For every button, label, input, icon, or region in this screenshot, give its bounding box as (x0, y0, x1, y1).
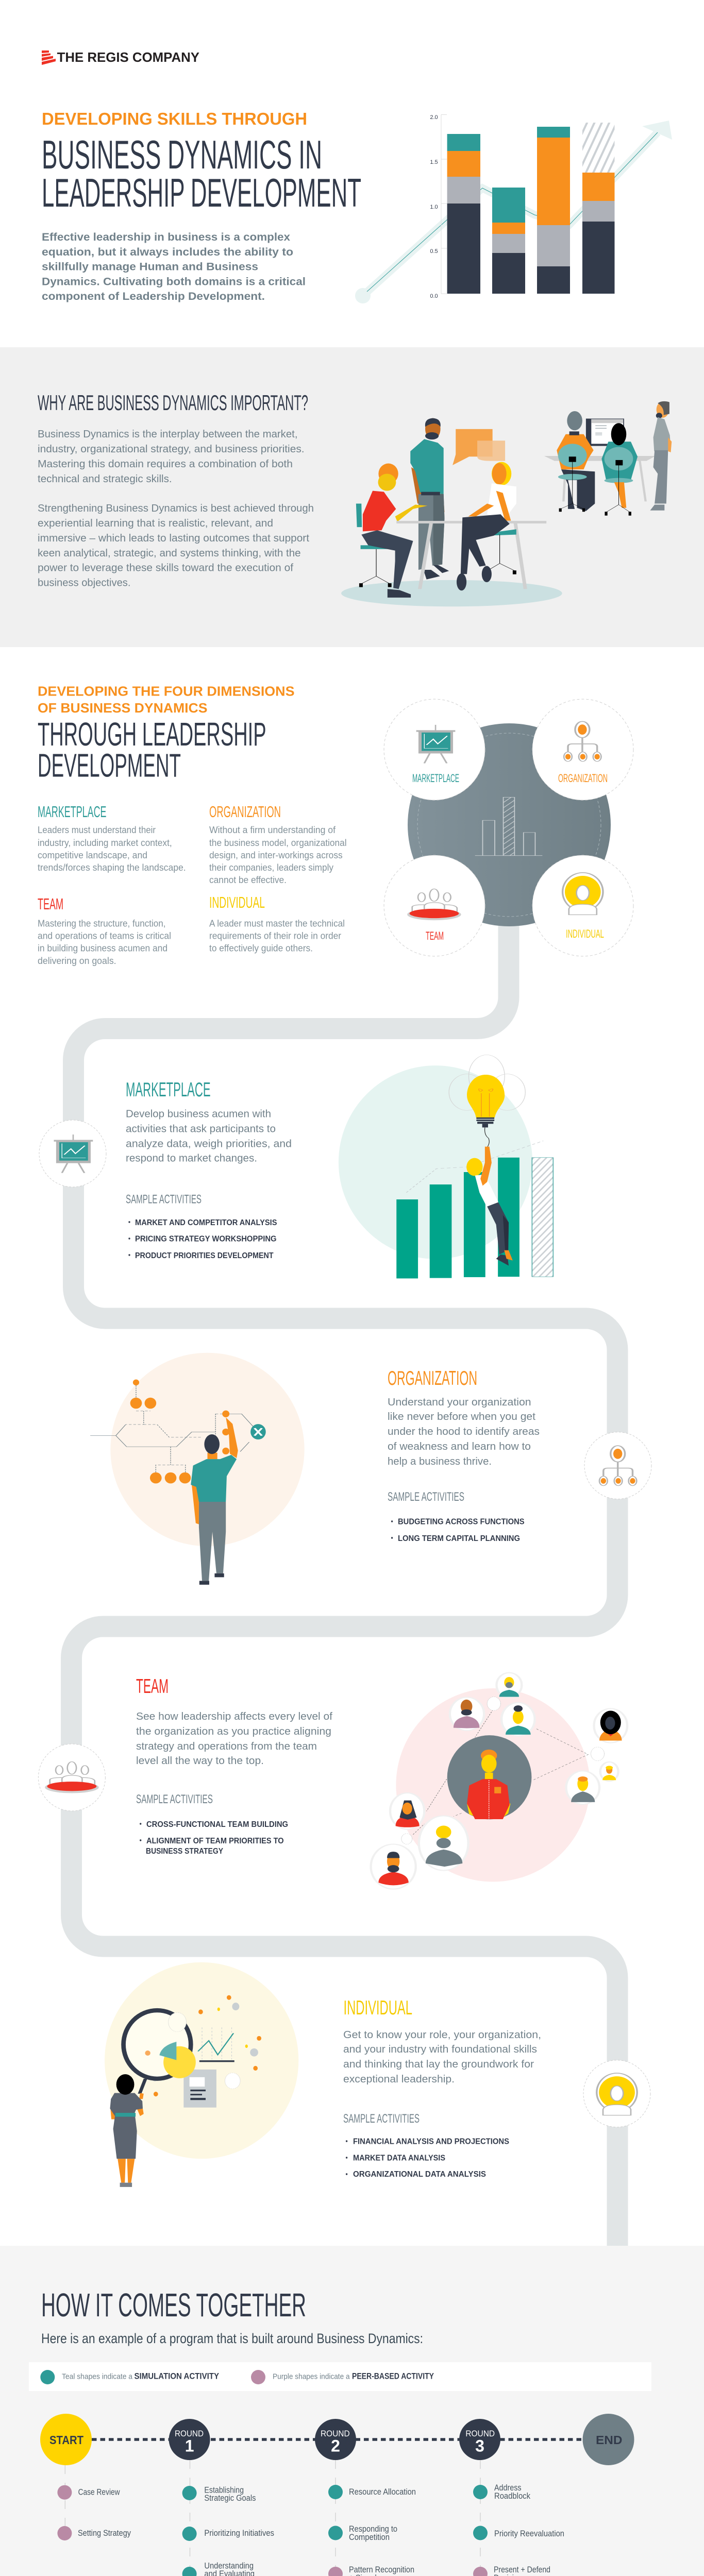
panel: individual (105, 1962, 650, 2187)
organization summary: the business model, organizational (209, 838, 347, 848)
icon: easel (39, 1120, 106, 1187)
icon: team (38, 1744, 105, 1811)
heading: THROUGH LEADERSHIP (38, 716, 266, 753)
sample activities (136, 1792, 288, 1856)
panel: team (38, 1673, 627, 1889)
eyebrow: DEVELOPING THE FOUR DIMENSIONS (38, 685, 295, 699)
heading: WHY ARE BUSINESS DYNAMICS IMPORTANT? (38, 391, 308, 415)
chart: stacked bars with trend arrow: 0.0 (430, 293, 438, 299)
panel: marketplace (39, 1055, 553, 1278)
chart: stacked bars with trend arrow: 2.0 (430, 114, 438, 121)
round 3 activities: Priority Reevaluation (494, 2529, 564, 2538)
sample activities: BUDGETING ACROSS FUNCTIONS (398, 1518, 525, 1526)
start (40, 2414, 92, 2465)
sample activities: MARKET DATA ANALYSIS (353, 2154, 445, 2163)
round 2 activities: Competition (349, 2533, 390, 2542)
round 1: 1 (185, 2437, 194, 2455)
description (126, 1108, 292, 1164)
team summary (38, 895, 171, 966)
right group (586, 418, 624, 446)
eyebrow: DEVELOPING SKILLS THROUGH (42, 109, 307, 128)
sample activities (388, 1490, 525, 1543)
round 2: 2 (331, 2437, 340, 2455)
marketplace summary: industry, including market context, (38, 838, 172, 848)
organization summary: design, and inter-workings across (209, 850, 343, 860)
round 1 activities (182, 2485, 276, 2576)
timeline (40, 2414, 634, 2576)
individual badge: INDIVIDUAL (566, 927, 604, 940)
individual summary: INDIVIDUAL (209, 893, 265, 911)
legend: Teal shapes indicate a (62, 2372, 133, 2381)
sample activities (343, 2112, 509, 2179)
table (420, 523, 525, 589)
start: START (49, 2433, 83, 2447)
description (343, 2029, 541, 2085)
end: END (596, 2433, 623, 2447)
round 2 activities (328, 2485, 416, 2576)
sample activities: ORGANIZATIONAL DATA ANALYSIS (353, 2170, 486, 2179)
heading: ORGANIZATION (388, 1367, 477, 1389)
legend (29, 2362, 651, 2391)
title (42, 132, 361, 215)
standing man (411, 467, 424, 503)
marketplace badge (384, 699, 485, 800)
description: See how leadership affects every level of (136, 1710, 332, 1722)
description: analyze data, weigh priorities, and (126, 1138, 292, 1150)
intro text: Effective leadership in business is a complex (42, 231, 290, 243)
sample activities (126, 1192, 277, 1260)
individual summary: A leader must master the technical (209, 919, 345, 929)
seated woman right (485, 529, 516, 536)
individual summary: to effectively guide others. (209, 943, 313, 954)
sample activities: BUSINESS STRATEGY (146, 1847, 223, 1856)
round 3 activities: Roadblock (494, 2492, 531, 2501)
heading: HOW IT COMES TOGETHER (41, 2286, 306, 2324)
round 1: ROUND (175, 2429, 204, 2438)
marketplace summary: MARKETPLACE (38, 803, 106, 821)
round 1 activities: Strategic Goals (204, 2494, 256, 2503)
description: activities that ask participants to (126, 1123, 276, 1134)
team summary: in building business acumen and (38, 943, 167, 954)
organization summary: ORGANIZATION (209, 803, 281, 821)
icon: individual (583, 2060, 650, 2127)
legend: SIMULATION ACTIVITY (134, 2371, 220, 2381)
round 3 activities: Present + Defend (494, 2565, 550, 2574)
sample activities: SAMPLE ACTIVITIES (136, 1792, 213, 1806)
title: LEADERSHIP DEVELOPMENT (42, 170, 361, 215)
seated woman left (356, 503, 362, 527)
individual summary (209, 893, 345, 954)
body text: power to leverage these skills toward the execution of (38, 562, 293, 574)
round 1 activities: Prioritizing Initiatives (204, 2529, 274, 2538)
connector path (71, 917, 617, 2246)
round 2: ROUND (321, 2429, 350, 2438)
intro text (42, 231, 306, 302)
description (388, 1396, 540, 1467)
organization badge: ORGANIZATION (558, 772, 608, 785)
subheading: Here is an example of a program that is built around Business Dynamics: (41, 2331, 423, 2346)
description: help a business thrive. (388, 1455, 492, 1467)
description: exceptional leadership. (343, 2073, 455, 2085)
avatars (371, 1673, 627, 1889)
body text: industry, organizational strategy, and business priorities. (38, 443, 305, 455)
body text: immersive – which leads to lasting outcomes that support (38, 532, 309, 544)
description (136, 1710, 332, 1767)
panel: why important (0, 347, 704, 647)
illustration: man building org chart (90, 1353, 305, 1585)
sample activities: FINANCIAL ANALYSIS AND PROJECTIONS (353, 2137, 509, 2146)
team badge (384, 855, 485, 956)
marketplace summary: trends/forces shaping the landscape. (38, 862, 186, 873)
chart: stacked bars with trend arrow: 1.5 (430, 159, 438, 165)
panel: hero (42, 109, 361, 302)
round 1 activities: Establishing (204, 2485, 244, 2495)
organization summary: their companies, leaders simply (209, 862, 333, 873)
team summary: delivering on goals. (38, 956, 116, 966)
team badge: TEAM (426, 929, 444, 942)
individual summary: requirements of their role in order (209, 931, 341, 941)
description: Get to know your role, your organization, (343, 2029, 541, 2041)
round 3 (459, 2419, 500, 2460)
intro text: equation, but it always includes the ability to (42, 246, 293, 258)
description: and your industry with foundational skills (343, 2043, 537, 2055)
body text: Mastering this domain requires a combination of both (38, 458, 293, 470)
logo: header: THE REGIS COMPANY (57, 49, 199, 65)
illustration: people network (371, 1673, 627, 1889)
illustration: team at tables (341, 401, 672, 606)
start activities: Case Review (78, 2488, 120, 2497)
description: Understand your organization (388, 1396, 531, 1408)
chart: stacked bars with trend arrow (355, 114, 672, 303)
legend: Purple shapes indicate a (273, 2372, 350, 2381)
description: respond to market changes. (126, 1153, 257, 1164)
body text: Strengthening Business Dynamics is best achieved through (38, 502, 314, 514)
sample activities: SAMPLE ACTIVITIES (388, 1490, 464, 1504)
heading: MARKETPLACE (126, 1079, 211, 1101)
heading: INDIVIDUAL (343, 1997, 412, 2019)
marketplace badge: MARKETPLACE (412, 772, 459, 785)
icon: org chart (584, 1432, 651, 1499)
sample activities: CROSS-FUNCTIONAL TEAM BUILDING (146, 1820, 288, 1829)
sample activities: PRODUCT PRIORITIES DEVELOPMENT (135, 1251, 274, 1260)
marketplace summary: competitive landscape, and (38, 850, 147, 860)
sample activities: PRICING STRATEGY WORKSHOPPING (135, 1235, 277, 1244)
round 3: 3 (475, 2437, 484, 2455)
panel: organization (90, 1353, 651, 1585)
marketplace summary (38, 803, 186, 873)
sample activities: SAMPLE ACTIVITIES (343, 2112, 420, 2126)
team summary: and operations of teams is critical (38, 931, 171, 941)
body text: Business Dynamics is the interplay between the market, (38, 428, 298, 440)
chart: stacked bars with trend arrow: 1.0 (430, 204, 438, 210)
eyebrow (38, 685, 295, 716)
sample activities: LONG TERM CAPITAL PLANNING (398, 1534, 520, 1543)
start activities: Setting Strategy (78, 2529, 131, 2538)
body text (38, 428, 314, 589)
body text: experiential learning that is realistic, relevant, and (38, 517, 273, 529)
body text: business objectives. (38, 577, 131, 589)
illustration: woman with magnifier (105, 1962, 298, 2187)
intro text: Dynamics. Cultivating both domains is a critical (42, 276, 306, 287)
description: Develop business acumen with (126, 1108, 271, 1120)
description: like never before when you get (388, 1411, 535, 1422)
eyebrow: OF BUSINESS DYNAMICS (38, 701, 207, 716)
heading: TEAM (136, 1675, 169, 1698)
heading: DEVELOPMENT (38, 747, 181, 784)
sample activities: MARKET AND COMPETITOR ANALYSIS (135, 1218, 277, 1227)
body text: keen analytical, strategic, and systems thinking, with the (38, 547, 301, 559)
team summary: TEAM (38, 895, 63, 913)
panel: four dimensions (38, 685, 347, 966)
round 2 activities: Resource Allocation (349, 2487, 416, 2497)
diagram: four dimension hub (384, 699, 633, 956)
heading (38, 716, 266, 784)
description: strategy and operations from the team (136, 1740, 317, 1752)
organization summary: Without a firm understanding of (209, 825, 336, 835)
individual badge (532, 855, 633, 956)
description: of weakness and learn how to (388, 1440, 531, 1452)
sample activities: SAMPLE ACTIVITIES (126, 1192, 202, 1207)
end (582, 2414, 634, 2465)
description: level all the way to the top. (136, 1755, 264, 1767)
round 2 activities: Pattern Recognition (349, 2565, 414, 2574)
organization summary: cannot be effective. (209, 875, 287, 885)
sample activities: ALIGNMENT OF TEAM PRIORITIES TO (146, 1837, 284, 1845)
body text: technical and strategic skills. (38, 473, 172, 485)
start activities (57, 2485, 131, 2540)
organization badge (532, 699, 633, 800)
description: under the hood to identify areas (388, 1426, 540, 1437)
illustration: woman hanging from bulb over bars (339, 1055, 553, 1278)
round 2 (315, 2419, 356, 2460)
chart: stacked bars with trend arrow: 0.5 (430, 248, 438, 255)
round 1 (169, 2419, 210, 2460)
legend: PEER-BASED ACTIVITY (352, 2371, 434, 2381)
description: the organization as you practice aligning (136, 1725, 331, 1737)
description: and thinking that lay the groundwork for (343, 2058, 534, 2070)
round 1 activities: Understanding (204, 2561, 254, 2570)
round 3 activities (473, 2483, 564, 2576)
intro text: component of Leadership Development. (42, 291, 265, 302)
title: BUSINESS DYNAMICS IN (42, 132, 322, 177)
intro text: skillfully manage Human and Business (42, 261, 258, 273)
team summary: Mastering the structure, function, (38, 919, 166, 929)
organization summary (209, 803, 347, 885)
marketplace summary: Leaders must understand their (38, 825, 156, 835)
round 2 activities: Responding to (349, 2524, 397, 2534)
round 3 activities: Address (494, 2483, 522, 2493)
panel: how it comes together (0, 2246, 704, 2576)
round 3: ROUND (465, 2429, 495, 2438)
